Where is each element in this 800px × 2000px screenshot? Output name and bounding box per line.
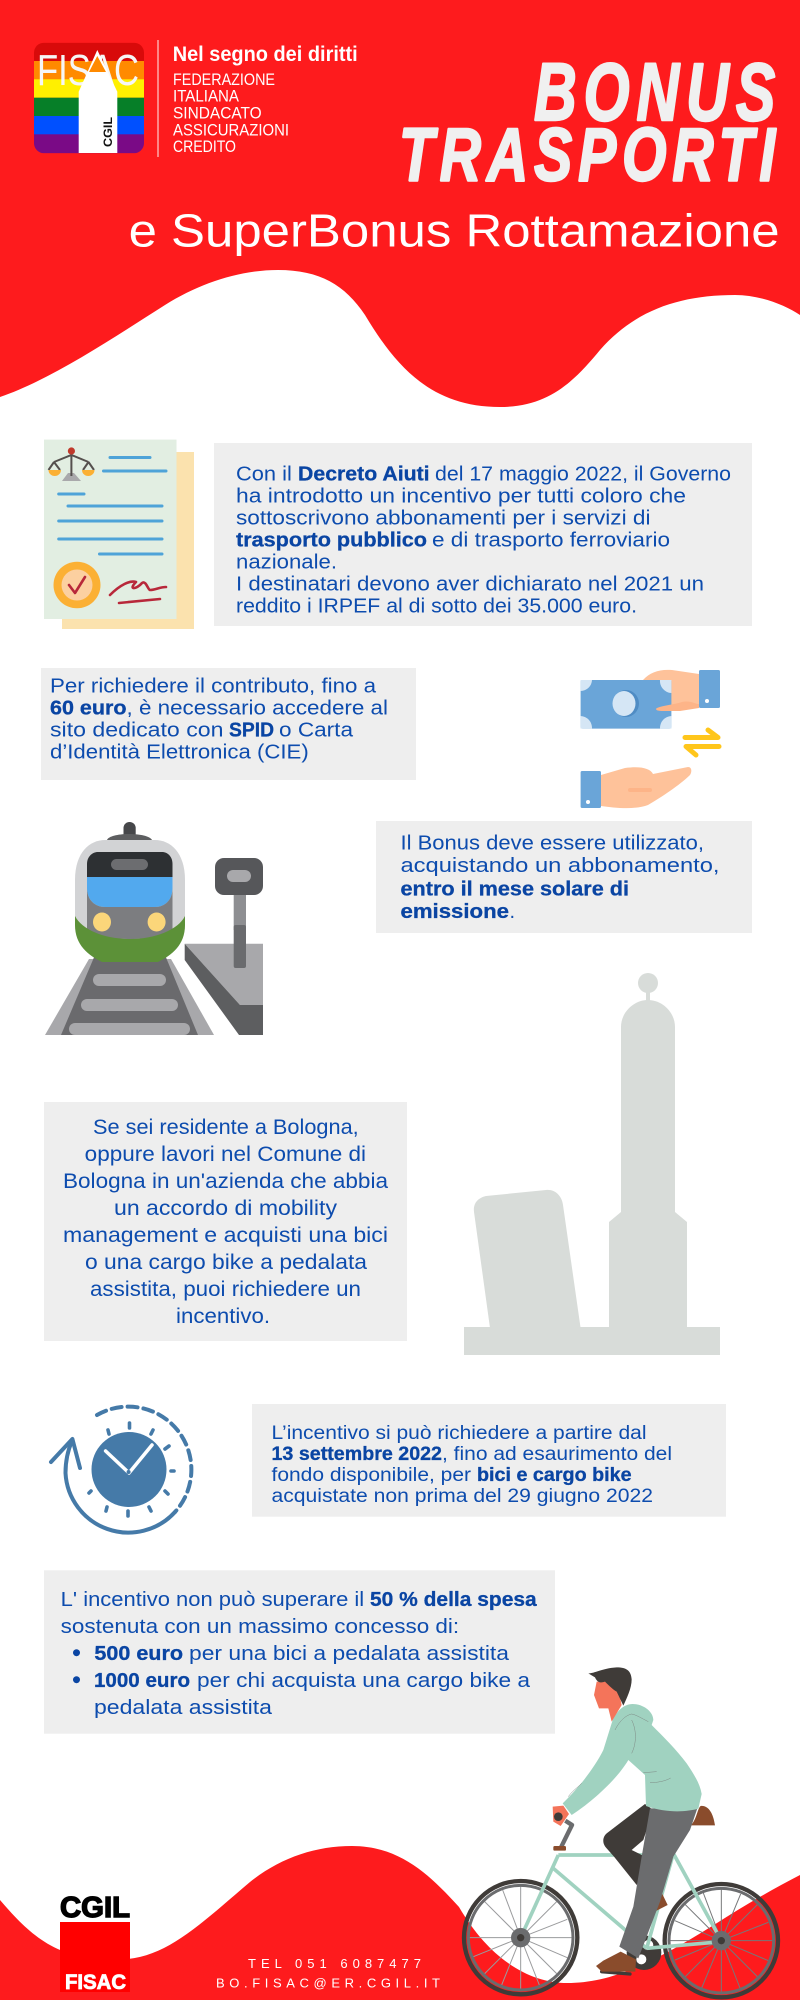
panel: residenti a Bologna: management e acquisti una bici [63, 1224, 388, 1247]
hair [588, 1667, 632, 1706]
panel: utilizzo del bonus [376, 821, 752, 933]
logo: CGIL FISAC: FISAC [65, 1971, 126, 1994]
panel: residenti a Bologna: o una cargo bike a pedalata [85, 1251, 367, 1274]
subtitle: e SuperBonus Rottamazione [129, 205, 780, 257]
union name text: FEDERAZIONE [173, 70, 275, 89]
panel: Decreto Aiuti: Decreto Aiuti [298, 463, 430, 485]
FISAC rainbow logo [34, 43, 144, 153]
panel: importi massimi: 1000 euro [94, 1670, 190, 1692]
panel: utilizzo del bonus: . [510, 901, 515, 923]
panel: date incentivo: , fino ad esaurimento del [442, 1444, 672, 1465]
panel: come richiedere il contributo: , è necessario accedere al [126, 698, 388, 720]
illustration: cyclist [464, 1667, 778, 1997]
union name text: Nel segno dei diritti [173, 43, 358, 66]
title: TRASPORTI [399, 114, 776, 197]
panel: Decreto Aiuti: nazionale. [236, 551, 337, 573]
panel: residenti a Bologna: un accordo di mobility [114, 1197, 338, 1220]
panel: date incentivo: L’incentivo si può richiedere a partire dal [272, 1423, 646, 1444]
union name text: SINDACATO [173, 103, 262, 122]
union name text: CREDITO [173, 137, 236, 156]
footer red wave background [0, 1846, 800, 2000]
icon: clock with circular arrow [51, 1407, 191, 1533]
panel: Decreto Aiuti: sottoscrivono abbonamenti per i servizi di [236, 507, 650, 529]
logo: CGIL FISAC [60, 1892, 130, 1994]
panel: date incentivo: 13 settembre 2022 [272, 1444, 442, 1465]
panel: Decreto Aiuti: I destinatari devono aver dichiarato nel 2021 un [236, 573, 704, 595]
FISAC rainbow logo: CGIL [101, 117, 115, 147]
header red wave background [0, 0, 800, 407]
chainring [602, 1935, 661, 1974]
rear wheel [665, 1884, 778, 1997]
panel: residenti a Bologna: oppure lavori nel Comune di [85, 1143, 366, 1166]
panel: Decreto Aiuti: Con il [236, 463, 292, 485]
hand [553, 1806, 569, 1826]
icon: legal document [44, 440, 194, 629]
panel: come richiedere il contributo: 60 euro [50, 698, 127, 720]
logo divider [157, 40, 159, 157]
panel: importi massimi: pedalata assistita [94, 1697, 273, 1719]
panel: Decreto Aiuti: ha introdotto un incentivo per tutti coloro che [236, 485, 686, 507]
panel: Decreto Aiuti: reddito i IRPEF al di sotto dei 35.000 euro. [236, 595, 637, 617]
contact details: BO.FISAC@ER.CGIL.IT [216, 1976, 440, 1991]
panel: Decreto Aiuti: trasporto pubblico [236, 529, 427, 551]
panel: date incentivo: bici e cargo bike [477, 1465, 632, 1486]
icon: towers of Bologna [464, 973, 720, 1355]
panel: utilizzo del bonus: acquistando un abbonamento, [400, 855, 720, 877]
panel: residenti a Bologna: Bologna in un'azienda che abbia [63, 1170, 388, 1193]
panel: importi massimi: per chi acquista una cargo bike a [197, 1670, 531, 1692]
icon: money exchange hands [581, 670, 720, 808]
panel: importi massimi: per una bici a pedalata assistita [189, 1643, 510, 1665]
union name text: ASSICURAZIONI [173, 121, 289, 140]
panel: date incentivo [252, 1404, 726, 1517]
near leg [619, 1808, 697, 1958]
far leg [603, 1804, 668, 1911]
panel: utilizzo del bonus: entro il mese solare di [400, 878, 629, 900]
near shoe [596, 1952, 636, 1972]
title [399, 47, 776, 197]
panel: importi massimi: 50 % della spesa [370, 1589, 538, 1611]
handlebar [553, 1821, 572, 1851]
panel: Decreto Aiuti [214, 443, 752, 626]
union name text: ITALIANA [173, 87, 240, 106]
panel: residenti a Bologna: assistita, puoi richiedere un [90, 1278, 361, 1301]
bicycle frame [521, 1853, 721, 1948]
icon: train on tracks with signal [45, 822, 263, 1035]
panel: utilizzo del bonus: Il Bonus deve essere utilizzato, [400, 832, 704, 854]
panel: come richiedere il contributo [41, 668, 416, 780]
saddle [691, 1806, 715, 1825]
panel: Decreto Aiuti: e di trasporto ferroviario [432, 529, 670, 551]
head and neck [594, 1682, 622, 1722]
panel: date incentivo: acquistate non prima del 29 giugno 2022 [272, 1486, 653, 1507]
panel: come richiedere il contributo: Per richiedere il contributo, fino a [50, 676, 377, 698]
FISAC rainbow logo: FISAC [37, 46, 139, 95]
panel: Decreto Aiuti: del 17 maggio 2022, il Governo [435, 463, 731, 485]
panel: importi massimi: sostenuta con un massimo concesso di: [61, 1616, 459, 1638]
logo: CGIL FISAC: CGIL [60, 1892, 130, 1924]
panel: come richiedere il contributo: d’Identità Elettronica (CIE) [50, 742, 309, 764]
front wheel [464, 1881, 577, 1994]
panel: residenti a Bologna: incentivo. [176, 1305, 270, 1328]
panel: come richiedere il contributo: o Carta [279, 720, 354, 742]
panel: importi massimi: 500 euro [94, 1643, 183, 1665]
contact details: TEL 051 6087477 [248, 1956, 421, 1971]
panel: residenti a Bologna [44, 1102, 407, 1341]
title: BONUS [534, 47, 775, 138]
panel: importi massimi [44, 1570, 555, 1734]
panel: importi massimi: L' incentivo non può superare il [61, 1589, 364, 1611]
wheel hubs [511, 1928, 731, 1950]
panel: residenti a Bologna: Se sei residente a Bologna, [93, 1116, 359, 1139]
hoodie [563, 1704, 702, 1815]
panel: come richiedere il contributo: sito dedicato con [50, 720, 223, 742]
contact details [216, 1956, 440, 1991]
panel: date incentivo: fondo disponibile, per [272, 1465, 472, 1486]
panel: utilizzo del bonus: emissione [400, 901, 509, 923]
union name text [173, 43, 358, 156]
panel: come richiedere il contributo: SPID [229, 720, 274, 742]
